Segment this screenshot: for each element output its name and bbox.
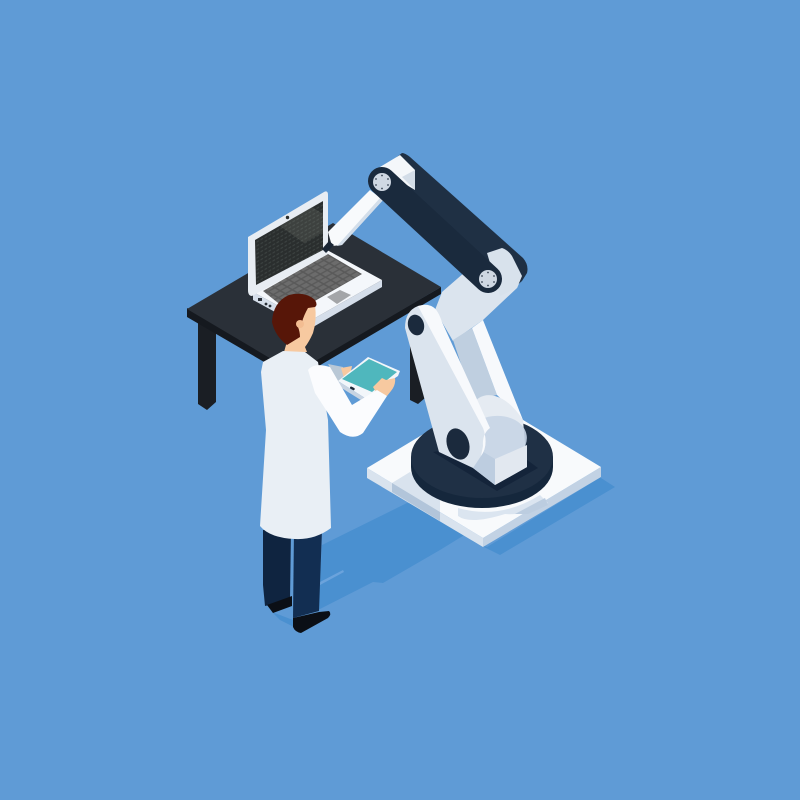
- cast shadow on plate top: [392, 472, 440, 512]
- robot rotating disc: [411, 416, 553, 508]
- neck and face: [284, 305, 316, 352]
- hub shaded front face: [473, 450, 495, 485]
- table leg left: [198, 320, 216, 410]
- upper white cap: [380, 155, 415, 190]
- cap shade: [402, 170, 415, 190]
- coat sleeve: [308, 365, 387, 437]
- laptop lid: [248, 191, 328, 296]
- forearm body: [328, 190, 383, 246]
- right leg: [293, 530, 322, 618]
- right shoe: [293, 611, 330, 633]
- lab coat: [260, 351, 331, 539]
- hub right lower face: [495, 445, 527, 485]
- ground shadows: [272, 477, 615, 628]
- screen reflection: [280, 207, 323, 243]
- robot thin forearm: [322, 190, 383, 253]
- robot base plate: [367, 397, 601, 547]
- disc side: [411, 457, 553, 508]
- elbow hole: [406, 313, 426, 337]
- forearm shade: [337, 198, 383, 246]
- tablet underside: [338, 381, 365, 402]
- trackpad: [327, 290, 351, 304]
- robot lower arm: [405, 272, 530, 485]
- upper joint housing: [435, 272, 522, 341]
- link front bar: [382, 181, 488, 279]
- plate top: [367, 397, 601, 538]
- shadow on plate side: [392, 483, 440, 521]
- left shoe: [267, 596, 292, 613]
- back sleeve: [328, 364, 346, 382]
- hair: [272, 294, 316, 345]
- table: [187, 223, 441, 410]
- table leg right: [410, 330, 425, 404]
- lower hole: [443, 425, 473, 463]
- right white strip: [472, 320, 523, 420]
- laptop base side: [253, 280, 382, 330]
- laptop base top: [253, 250, 382, 322]
- laptop screen: [255, 201, 323, 285]
- lower light cap: [487, 248, 522, 296]
- table top: [187, 223, 441, 373]
- forearm tip: [322, 241, 334, 253]
- tablet body: [338, 357, 400, 398]
- arm foot recess: [433, 440, 538, 491]
- grey inner face: [453, 328, 497, 400]
- main arm face: [405, 306, 486, 468]
- hub shaded ellipse: [460, 412, 530, 468]
- tablet button: [350, 386, 355, 391]
- upper bolt disc: [373, 173, 391, 191]
- lower bolt disc: [479, 270, 497, 288]
- disc top: [411, 416, 553, 498]
- link back plate: [372, 153, 528, 287]
- tablet screen: [342, 359, 397, 392]
- hub: [470, 395, 527, 485]
- webcam: [286, 216, 289, 219]
- back hand: [341, 366, 352, 378]
- laptop: [248, 191, 382, 330]
- disc reflection on plate: [458, 495, 548, 520]
- front hand: [373, 378, 395, 396]
- plate left side: [367, 468, 483, 547]
- left leg: [263, 530, 291, 606]
- ear: [296, 320, 304, 328]
- keyboard: [263, 254, 362, 314]
- front white band: [418, 305, 490, 456]
- ports: [258, 298, 271, 307]
- engineer: [260, 294, 400, 633]
- table edge: [187, 287, 441, 380]
- robot upper link: [372, 153, 528, 296]
- plate right side: [483, 467, 601, 547]
- tablet: [338, 357, 400, 402]
